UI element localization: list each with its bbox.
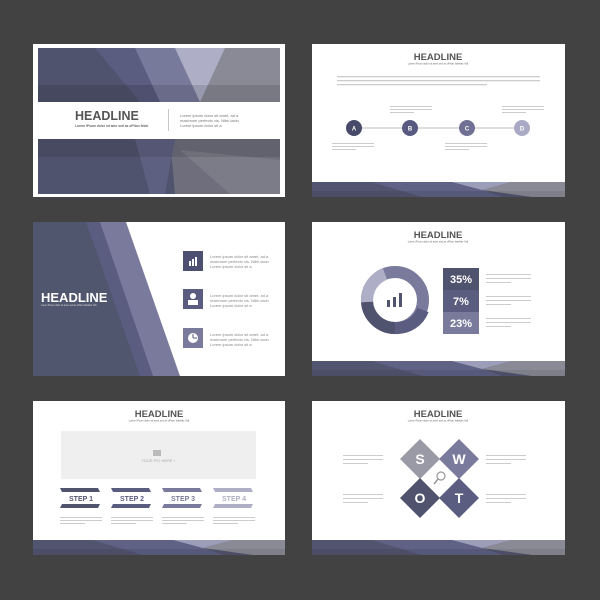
SWOT diamonds: T: [455, 490, 464, 506]
circles A-D: [346, 120, 530, 136]
circles A-D: C: [465, 126, 470, 132]
panel: slide 2 timeline: [312, 44, 565, 197]
percentage boxes: [443, 268, 479, 334]
donut chart: [367, 272, 423, 328]
text block: Lorem ipsum dolor sit a: [180, 123, 222, 128]
panel: slide 2 timeline: Lorem iPsum dolor sit amet sed as oPtion fabellas Vidi: [408, 62, 469, 66]
text blocks: Lorem ipsum dolor sit amet, ad a: [210, 293, 269, 298]
text blocks: Lorem ipsum dolor sit a: [210, 303, 252, 308]
steps: STEP 3: [171, 496, 195, 503]
picture placeholder: [61, 431, 256, 479]
text blocks: maximum perfecto vis. Nibh lacin: [210, 337, 269, 342]
text block: [180, 113, 239, 128]
text blocks: maximum perfecto vis. Nibh lacin: [210, 259, 269, 264]
text blocks: Lorem ipsum dolor sit amet, ad a: [210, 332, 269, 337]
panel: slide 3 headline with icons: [33, 222, 285, 376]
icon: bar chart: [183, 251, 203, 271]
steps: STEP 1: [69, 496, 93, 503]
panel: slide 4 donut: HEADLINE: [414, 230, 462, 241]
circles A-D: A: [352, 126, 357, 132]
steps: STEP 4: [222, 496, 246, 503]
text blocks: Lorem ipsum dolor sit amet, ad a: [210, 254, 269, 259]
steps: [60, 488, 253, 508]
text blocks: maximum perfecto vis. Nibh lacin: [210, 298, 269, 303]
picture placeholder: YOUR PIC HERE !: [141, 458, 175, 463]
circles A-D: B: [408, 126, 413, 132]
panel: slide 1 banner: [33, 44, 285, 197]
panel: slide 5 steps: [33, 401, 285, 555]
text block: maximum perfecto vis. Nibh lacin: [180, 118, 239, 123]
panel: slide 5 steps: HEADLINE: [135, 409, 183, 420]
SWOT diamonds: S: [415, 451, 425, 467]
text blocks: Lorem ipsum dolor sit a: [210, 264, 252, 269]
percentage boxes: 7%: [453, 296, 469, 308]
circles A-D: D: [520, 126, 525, 132]
percentage boxes: 23%: [450, 318, 472, 330]
subtitle: Lorem iPsum dolor sit ame sed as oPtion febel: [75, 124, 148, 128]
headline: HEADLINE: [75, 109, 139, 123]
SWOT diamonds: W: [452, 451, 466, 467]
SWOT diamonds: [400, 439, 479, 518]
panel: slide 6 SWOT: Lorem iPsum dolor sit amet sed as oPtion fabellas Vidi: [408, 420, 469, 422]
text blocks: Lorem ipsum dolor sit a: [210, 342, 252, 347]
headline: HEADLINE: [41, 290, 108, 305]
percentage boxes: 35%: [450, 274, 472, 286]
text block: Lorem ipsum dolor sit amet, ad a: [180, 113, 239, 118]
panel: slide 3 headline with icons: Lorem iPsum dolor sit amet sed as oPtion fabellas Vidi: [41, 304, 97, 307]
icon: clock: [183, 328, 203, 348]
panel: slide 4 donut: Lorem iPsum dolor sit amet sed as oPtion fabellas Vidi: [408, 240, 469, 244]
SWOT diamonds: O: [415, 490, 426, 506]
icon: person: [183, 289, 203, 309]
panel: slide 5 steps: Lorem iPsum dolor sit amet sed as oPtion fabellas Vidi: [129, 420, 190, 422]
text blocks: [210, 254, 269, 347]
headline: HEADLINE: [414, 52, 462, 63]
panel: slide 4 donut: [312, 222, 565, 376]
panel: slide 6 SWOT: HEADLINE: [414, 409, 462, 420]
bottom band: [312, 182, 565, 197]
steps: STEP 2: [120, 496, 144, 503]
panel: slide 6 SWOT: [312, 401, 565, 555]
